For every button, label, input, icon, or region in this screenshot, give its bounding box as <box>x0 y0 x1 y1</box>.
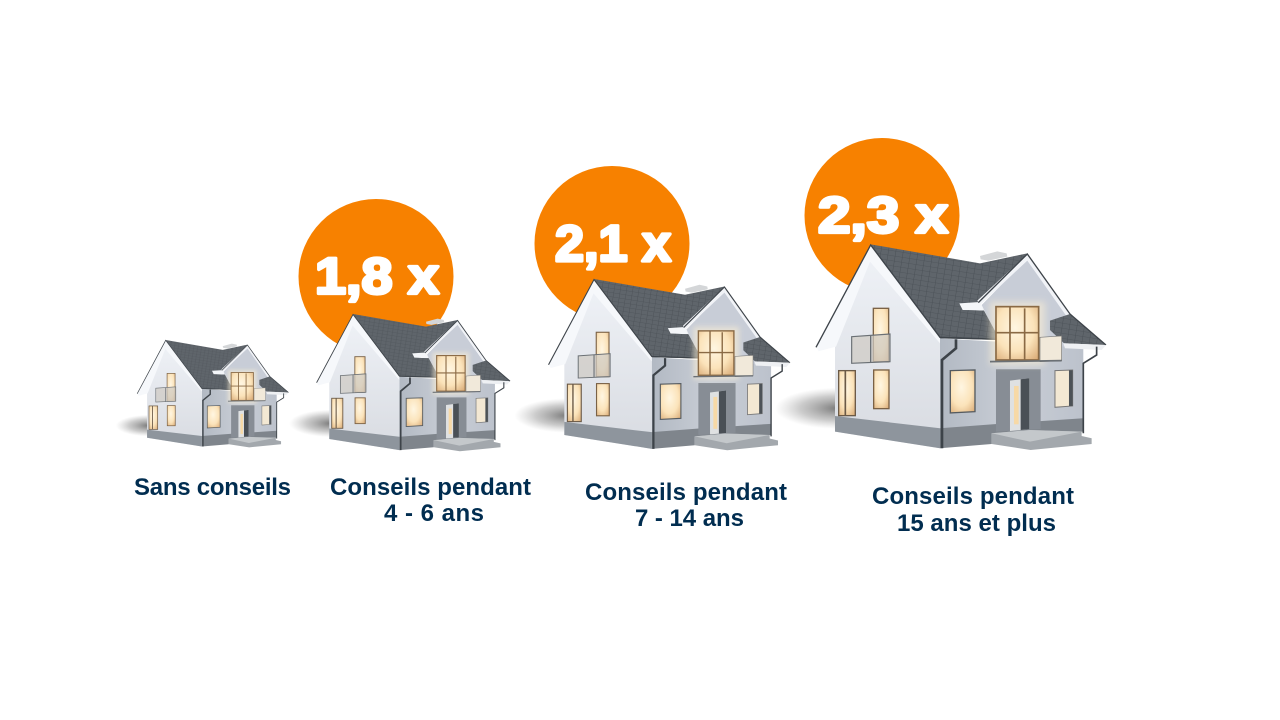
circle: 1,8 x <box>298 199 454 354</box>
house 2: 4 - 6 ans <box>289 314 510 451</box>
circle: 1,8 x: 1,8 x <box>315 248 439 304</box>
house 3: 7 - 14 ans <box>514 279 790 450</box>
label: conseils 7 - 14 ans: 7 - 14 ans <box>635 505 744 532</box>
label: conseils 7 - 14 ans: Conseils pendant <box>585 479 787 506</box>
circle: 2,3 x: 2,3 x <box>818 186 948 244</box>
label: conseils 4 - 6 ans: Conseils pendant <box>330 474 531 501</box>
house 4: 15 ans et plus <box>775 244 1106 450</box>
circle: 2,1 x <box>534 166 690 321</box>
label: sans conseils: Sans conseils <box>134 474 291 501</box>
label: conseils 15 ans et plus: Conseils pendant <box>872 483 1074 510</box>
circle: 2,3 x <box>804 138 960 293</box>
house 1: sans conseils <box>116 340 289 447</box>
label: conseils 15 ans et plus: 15 ans et plus <box>897 510 1056 537</box>
circle: 2,1 x: 2,1 x <box>555 215 671 272</box>
label: conseils 4 - 6 ans: 4 - 6 ans <box>384 500 484 527</box>
